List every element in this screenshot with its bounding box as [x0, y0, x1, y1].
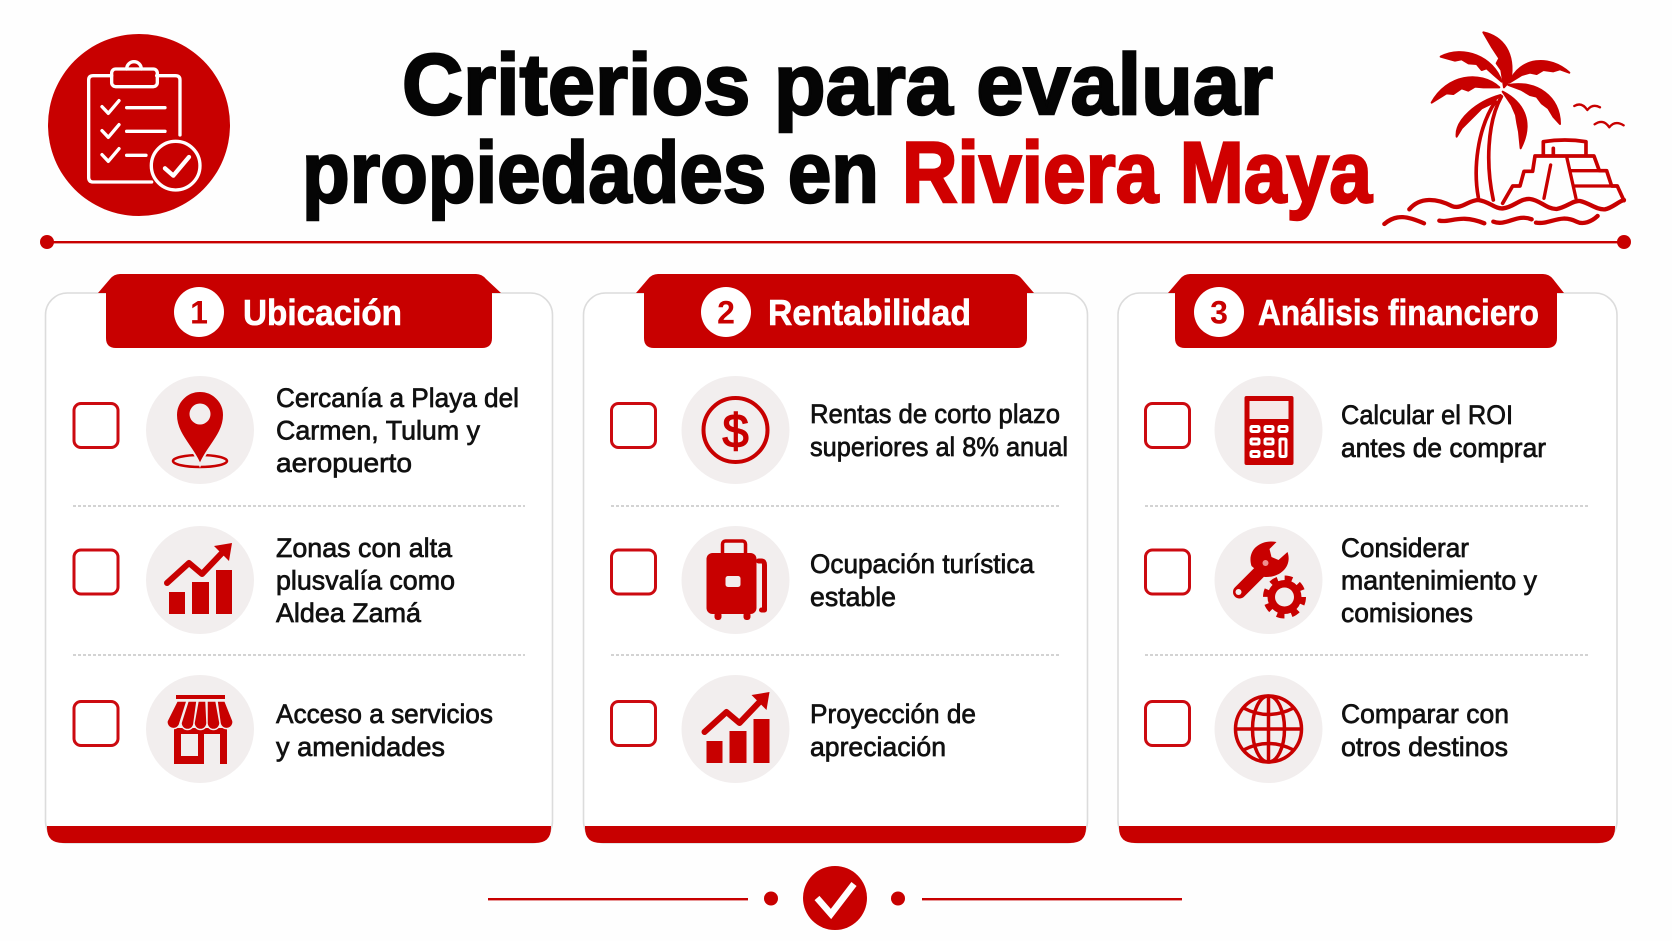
item: Acceso a servicios — [74, 675, 493, 783]
item: Comparar con otros destinos: otros destinos — [1341, 732, 1508, 762]
icon: dollar coin — [704, 398, 768, 462]
icon: growth chart — [704, 692, 770, 763]
item: Cercanía — [74, 376, 519, 484]
icon: growth chart — [167, 543, 232, 614]
item: Comparar con otros destinos — [1146, 675, 1509, 783]
title: Riviera Maya — [902, 125, 1373, 221]
item: Calcular el ROI: antes de comprar — [1341, 433, 1546, 463]
item: Considerar mantenimiento: mantenimiento y — [1341, 566, 1537, 596]
heading tab: 2 Rentabilidad — [636, 274, 1034, 348]
item: Acceso a servicios: Acceso a servicios — [276, 699, 493, 729]
icon: suitcase — [706, 541, 764, 620]
item: Considerar mantenimiento: comisiones — [1341, 598, 1473, 628]
item: Proyección de apreciación: Proyección de — [810, 699, 976, 729]
item: Ocupación turística — [612, 526, 1035, 634]
icon: palm tree and Mayan pyramid by the sea — [1384, 32, 1624, 224]
item: Rentas de corto plazo: Rentas de corto plazo — [810, 399, 1060, 429]
heading tab: 3 Análisis financiero: 3 — [1210, 294, 1228, 330]
item: Rentas de corto plazo — [612, 376, 1068, 484]
title: propiedades en — [302, 125, 879, 221]
item: Cercanía: Carmen, Tulum y — [276, 416, 480, 446]
panel: Ubicación — [46, 274, 552, 843]
item: Calcular el ROI — [1146, 376, 1546, 484]
item: Considerar mantenimiento — [1146, 526, 1537, 634]
item: Rentas de corto plazo: superiores al 8% anual — [810, 432, 1068, 462]
footer ornament: check badge with lines and dots — [488, 866, 1182, 930]
panel footer bar — [47, 826, 551, 843]
icon: wrench and gear — [1236, 542, 1303, 616]
heading tab: 3 Análisis financiero — [1168, 274, 1564, 348]
item: Proyección de apreciación: apreciación — [810, 732, 946, 762]
item: Proyección de apreciación — [612, 675, 976, 783]
item: Zonas con alta plusvalía: Aldea Zamá — [276, 598, 422, 628]
item: Zonas con alta plusvalía: Zonas con alta — [276, 533, 453, 563]
heading tab: 3 Análisis financiero: Análisis financiero — [1258, 292, 1539, 333]
icon: calculator — [1244, 396, 1294, 465]
title — [302, 37, 1373, 221]
item: Ocupación turística: Ocupación turística — [810, 549, 1035, 579]
item: Zonas con alta plusvalía: plusvalía como — [276, 566, 455, 596]
item: Zonas con alta plusvalía — [74, 526, 455, 634]
panel footer bar — [585, 826, 1086, 843]
heading tab: 2 Rentabilidad: 2 — [717, 294, 735, 330]
item: Ocupación turística: estable — [810, 582, 896, 612]
title: Criterios para evaluar — [402, 37, 1273, 133]
item: Calcular el ROI: Calcular el ROI — [1341, 400, 1513, 430]
item: Acceso a servicios: y amenidades — [276, 732, 445, 762]
icon: dollar coin: $ — [722, 404, 749, 457]
item: Considerar mantenimiento: Considerar — [1341, 533, 1469, 563]
top divider line with end dots — [40, 235, 1631, 249]
item: Cercanía: aeropuerto — [276, 448, 412, 478]
icon: storefront — [167, 695, 233, 764]
icon: clipboard checklist badge — [48, 34, 230, 216]
item: Comparar con otros destinos: Comparar con — [1341, 699, 1509, 729]
heading tab: 1 Ubicación: 1 — [190, 294, 208, 330]
heading tab: 2 Rentabilidad: Rentabilidad — [768, 292, 971, 333]
heading tab: 1 Ubicación — [98, 274, 501, 348]
icon: location pin — [173, 391, 227, 467]
icon: globe — [1236, 696, 1302, 762]
panel: Análisis financiero — [1118, 274, 1617, 843]
panel footer bar — [1119, 826, 1615, 843]
heading tab: 1 Ubicación: Ubicación — [243, 292, 402, 333]
panel: Rentabilidad — [584, 274, 1088, 843]
item: Cercanía: Cercanía a Playa del — [276, 383, 519, 413]
